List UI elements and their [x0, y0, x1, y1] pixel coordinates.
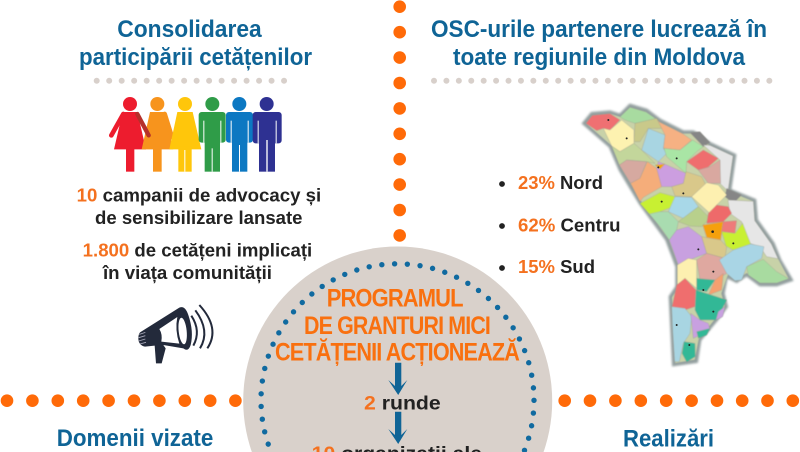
- arrow: down to organisations: [388, 412, 407, 444]
- arrow: down to rounds: [388, 363, 407, 395]
- text: citizens involved: în viața comunității: [102, 262, 272, 283]
- list: regional percentages: 62% Centru: [518, 215, 620, 236]
- heading: partner regions: [431, 16, 767, 71]
- heading: citizen participation: participării cetățenilor: [79, 44, 312, 71]
- heading: targeted domains: Domenii vizate: [57, 425, 213, 452]
- title: programme name: PROGRAMUL: [327, 285, 463, 313]
- dotted blue ring: [261, 264, 534, 452]
- icon: megaphone: [138, 305, 212, 363]
- heading: citizen participation: Consolidarea: [117, 16, 262, 43]
- title: programme name: CETĂȚENII ACȚIONEAZĂ: [275, 338, 520, 367]
- text: citizens involved: [83, 240, 312, 283]
- right horizontal orange dotted divider: [558, 394, 799, 407]
- text: 2 rounds: 2 runde: [364, 392, 441, 414]
- grey disc: [243, 246, 552, 452]
- panel: central grant programme circle: [243, 246, 552, 452]
- list: regional percentages: 23% Nord: [518, 172, 603, 193]
- icon: rainbow row of people: [111, 97, 282, 172]
- title: programme name: [275, 285, 520, 367]
- text: campaigns launched: 10 campanii de advocacy și: [77, 185, 321, 206]
- list: regional percentages: [499, 172, 620, 277]
- dotted rule under regions heading: [434, 78, 770, 84]
- panel: citizen participation: [77, 16, 321, 363]
- list: regional percentages: 15% Sud: [518, 256, 595, 277]
- title: programme name: DE GRANTURI MICI: [304, 312, 490, 340]
- left horizontal orange dotted divider: [1, 394, 242, 407]
- vertical orange dotted divider: [393, 0, 406, 242]
- panel: partner regions: [431, 16, 792, 365]
- heading: achievements: Realizări: [623, 426, 714, 452]
- heading: partner regions: OSC-urile partenere lucrează în: [431, 16, 767, 43]
- heading: citizen participation: [79, 16, 312, 71]
- text: campaigns launched: [77, 185, 321, 228]
- map: regions of Moldova: [583, 105, 792, 365]
- text: campaigns launched: de sensibilizare lansate: [95, 207, 302, 228]
- heading: partner regions: toate regiunile din Moldova: [453, 44, 746, 71]
- dotted rule under heading: [97, 78, 296, 84]
- text: citizens involved: 1.800 de cetățeni implicați: [83, 240, 312, 261]
